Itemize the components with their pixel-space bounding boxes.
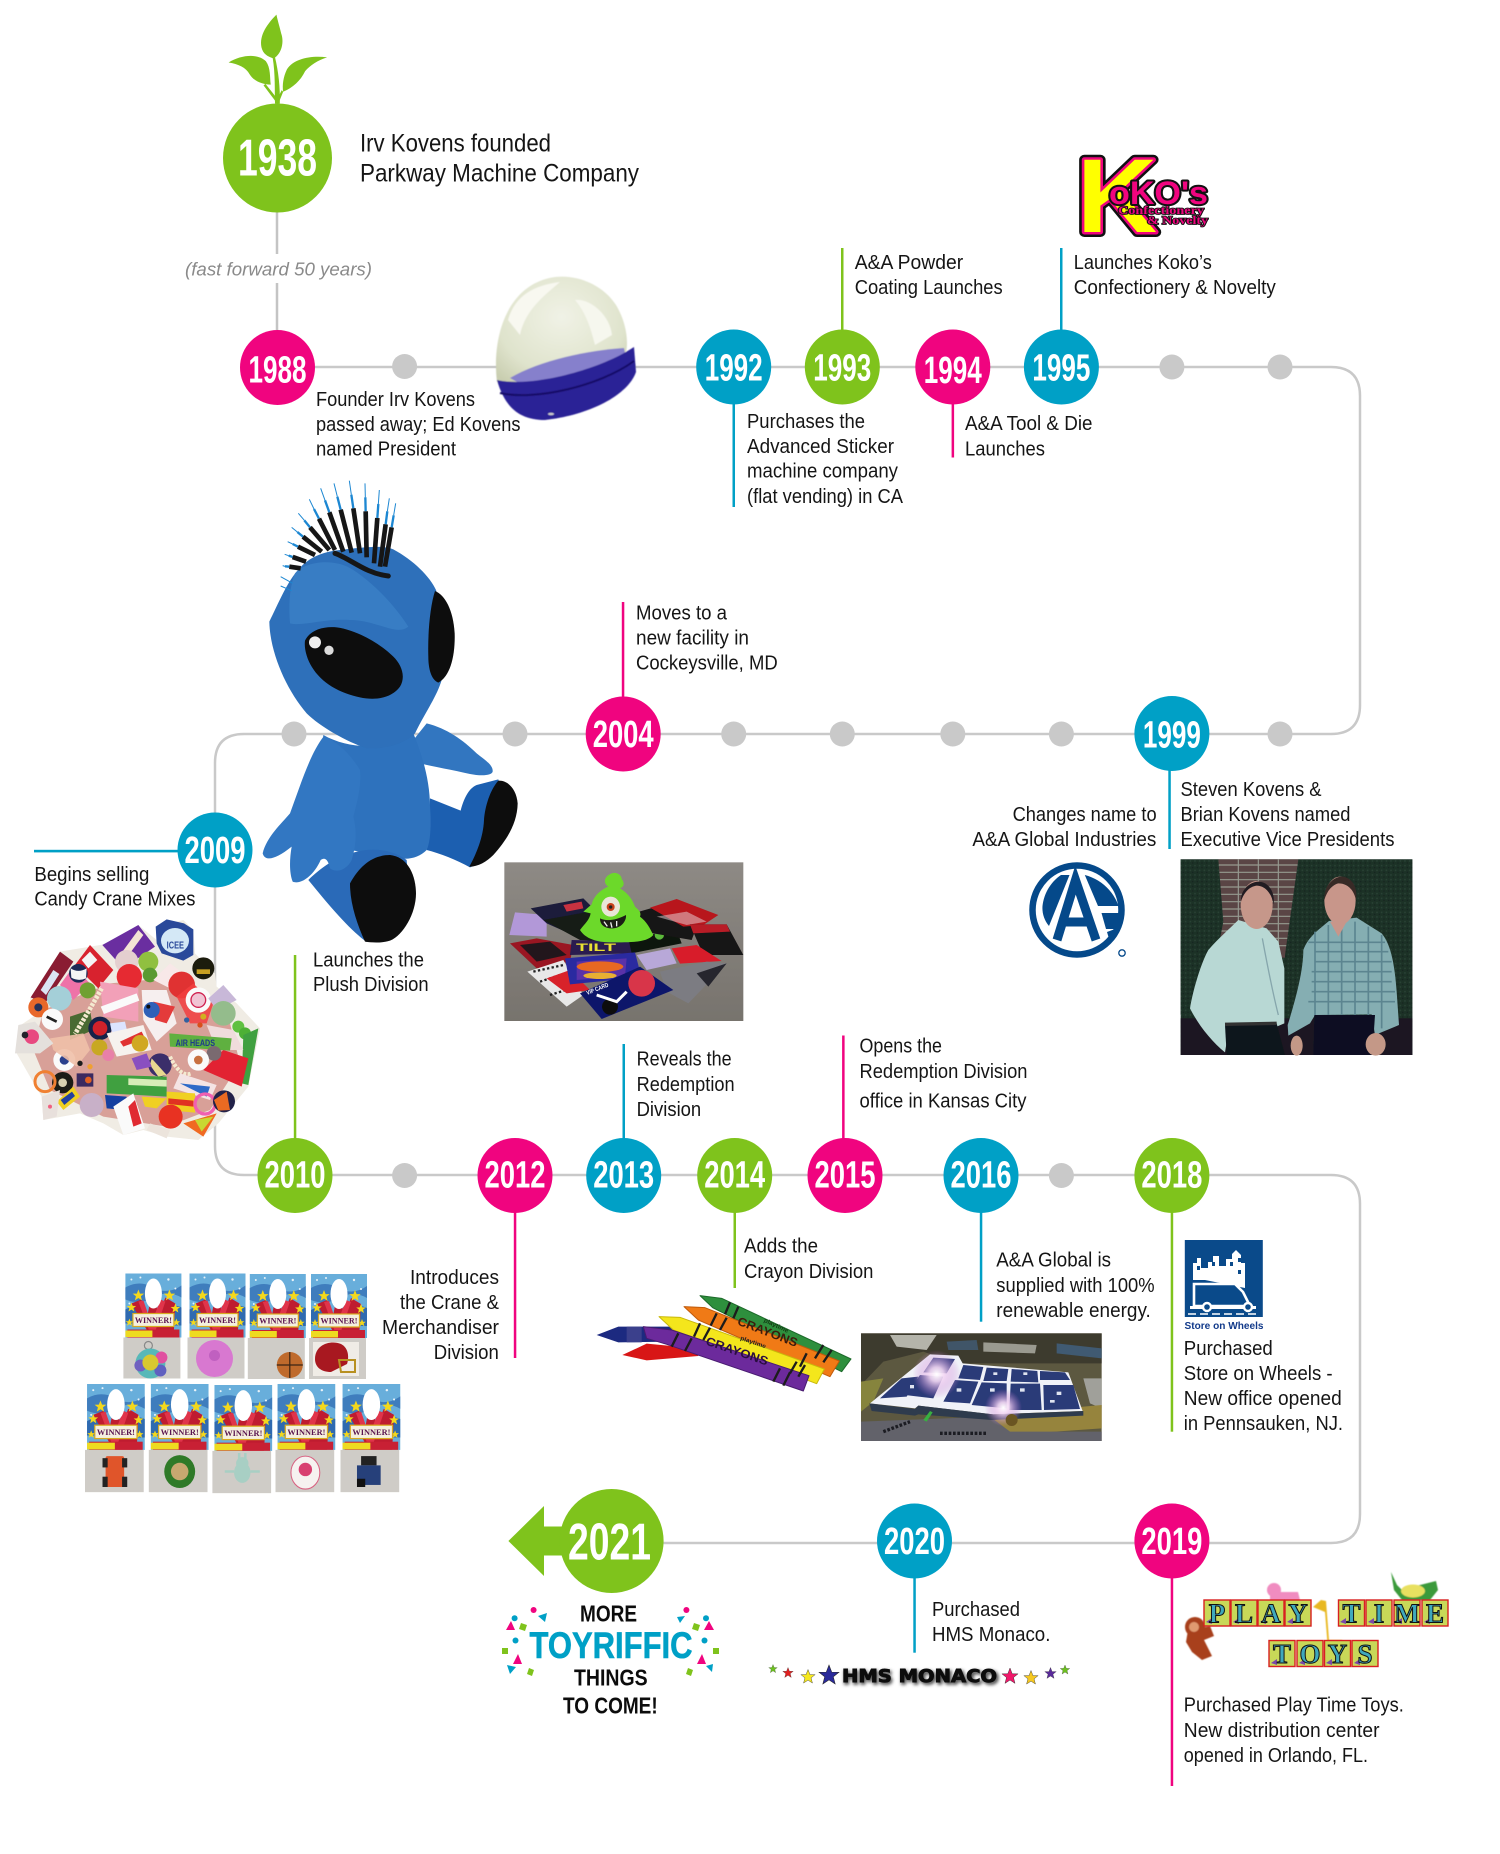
milestone: 2014: 2014 (704, 1154, 765, 1196)
callout: more toyriffic things to come (502, 1600, 719, 1718)
card: green ball (149, 1384, 209, 1492)
callout: more toyriffic things to come: THINGS (574, 1664, 648, 1690)
logo: Store on Wheels: Store on Wheels (1184, 1321, 1264, 1332)
image: candy crane mix pile (15, 919, 260, 1140)
text: 2016: renewable energy. (996, 1299, 1151, 1322)
text: 2012: Division (434, 1341, 499, 1364)
confetti (502, 1607, 719, 1676)
text: 2004: Moves to a (636, 602, 728, 624)
card: baseball (276, 1384, 335, 1492)
milestone: 2016 (944, 1138, 1018, 1322)
milestone: 2004: 2004 (593, 714, 654, 756)
milestone: 2013: 2013 (593, 1154, 654, 1196)
timeline dots (282, 354, 1292, 1188)
logo: Koko's Confectionery & Novelty (1077, 138, 1208, 255)
icon: sprout (229, 15, 327, 104)
milestone: 1938 (223, 104, 332, 212)
milestone: 2009 (34, 812, 252, 888)
text: 2019 (1184, 1694, 1404, 1767)
text: 2015: Opens the (860, 1034, 942, 1058)
milestone: 2012: 2012 (484, 1154, 546, 1196)
text: 2016: supplied with 100% (996, 1274, 1155, 1297)
milestone: 1938: 1938 (238, 130, 317, 188)
text: 1999 name change (972, 803, 1157, 851)
text: 1993 (855, 251, 1003, 299)
milestone: 2020: 2020 (884, 1521, 945, 1563)
milestone: 1995 (1024, 248, 1099, 404)
logo letters: Y (1328, 1639, 1347, 1669)
text: 1999 executive vice presidents: Steven Kovens & (1180, 778, 1322, 801)
image: toy capsule (496, 277, 636, 420)
photo: redemption cards and green monster: VIP CARD (586, 982, 610, 997)
text: 2016 (996, 1248, 1155, 1322)
timeline path (215, 367, 1360, 1543)
text: 2013 (637, 1048, 735, 1121)
milestone: 1993: 1993 (813, 348, 871, 390)
milestone: 1988 (240, 330, 315, 405)
text: 1994: Launches (965, 438, 1045, 460)
photo: redemption cards and green monster (504, 862, 743, 1021)
logo letters: A (1261, 1598, 1281, 1628)
milestone: 2013 (586, 1044, 661, 1213)
milestone: 1999 (1134, 696, 1209, 849)
logo: HMS Monaco: HMS MONACO (842, 1666, 997, 1687)
text: 1992: Advanced Sticker (747, 435, 894, 458)
milestone: 1992 (696, 330, 771, 507)
text: 2014: Crayon Division (744, 1260, 873, 1283)
milestone: 1994 (915, 330, 990, 458)
text: 1995: Launches Koko’s (1074, 251, 1212, 274)
card: red truck (85, 1384, 145, 1492)
text: 1994: A&A Tool & Die (965, 412, 1092, 435)
card: flower keychain: WINNER! (135, 1316, 172, 1325)
text: 2012: Merchandiser (382, 1316, 499, 1339)
image: crayons (597, 1296, 851, 1391)
card: basketball (248, 1274, 306, 1379)
text: 2010 (313, 948, 429, 996)
card: basketball: WINNER! (259, 1316, 296, 1326)
callout: more toyriffic things to come: TO COME! (563, 1692, 658, 1718)
text: 1999 executive vice presidents: Executive Vice Presidents (1180, 828, 1394, 851)
logo: Koko's Confectionery & Novelty: oKO's (1109, 175, 1208, 211)
logo letters: L (1235, 1598, 1253, 1628)
text: 1999 executive vice presidents: Brian Kovens named (1180, 803, 1350, 826)
milestone: 2016: 2016 (950, 1154, 1012, 1196)
text: 1994 (965, 412, 1092, 460)
text: 2014 (744, 1234, 873, 1283)
text: 1938 founding: Parkway Machine Company (360, 160, 639, 188)
logo letter blocks (1204, 1600, 1448, 1666)
milestone: 2004 (586, 602, 661, 772)
logo letters: S (1357, 1639, 1373, 1669)
text: 1988: named President (316, 438, 456, 460)
image: crayons: CRAYONS (704, 1334, 770, 1368)
image: candy crane mix pile: ICEE (167, 940, 184, 951)
text: 1999 name change: A&A Global Industries (972, 828, 1156, 851)
text: 2012 (382, 1266, 499, 1364)
text: 2015: Redemption Division (860, 1060, 1028, 1083)
card: red truck: WINNER! (97, 1428, 135, 1437)
logo: Play Time Toys (1185, 1572, 1448, 1669)
logo letters: T (1273, 1639, 1291, 1669)
logo: A&A Global (1032, 866, 1125, 956)
text: 1999 name change: Changes name to (1013, 803, 1157, 826)
text: 2020: Purchased (932, 1598, 1020, 1621)
text: 2010: Plush Division (313, 973, 429, 996)
card: pink disc (188, 1274, 246, 1378)
text: 2014: Adds the (744, 1234, 818, 1258)
card: football helmet (309, 1274, 367, 1379)
milestone: 2015: 2015 (814, 1154, 876, 1196)
text: 1992: (flat vending) in CA (747, 485, 903, 508)
image: crayons: playtime (739, 1336, 767, 1350)
logo: Store on Wheels (1184, 1240, 1264, 1332)
milestone: 2010 (258, 955, 332, 1213)
text: 2015 (860, 1034, 1028, 1112)
logo: Koko's Confectionery & Novelty: K (1077, 138, 1157, 255)
text: 2009: Begins selling (34, 863, 149, 886)
card: baseball: WINNER! (287, 1428, 326, 1437)
milestone: 2020 (877, 1504, 952, 1653)
logo letters (1209, 1598, 1444, 1669)
text: 2013: Reveals the (637, 1048, 732, 1070)
logo letters: M (1394, 1598, 1420, 1628)
text: 1938 founding (360, 130, 639, 188)
logo animals (1185, 1572, 1438, 1660)
image: crane winner cards (85, 1274, 400, 1493)
milestone: 1999: 1999 (1143, 714, 1201, 756)
milestone: 2014 (697, 1138, 772, 1288)
text: 2018: Store on Wheels - (1184, 1362, 1333, 1385)
photo: redemption cards and green monster: TILT (576, 942, 616, 954)
text: 1988 (316, 388, 520, 460)
text: 2012: the Crane & (400, 1291, 499, 1314)
text: 1992 (747, 410, 903, 508)
milestone: 2021 (560, 1489, 664, 1593)
text: 2020: HMS Monaco. (932, 1623, 1050, 1646)
text: 2019: New distribution center (1184, 1719, 1380, 1742)
text: 2012: Introduces (410, 1266, 499, 1289)
logo: Koko's Confectionery & Novelty: K (1077, 138, 1157, 255)
text: 2018 (1184, 1337, 1343, 1435)
logo letters: Y (1288, 1598, 1308, 1628)
card: mint bunny: WINNER! (224, 1429, 263, 1438)
card: mint bunny (212, 1385, 272, 1493)
logo letters: T (1342, 1598, 1361, 1628)
milestone: 2019 (1134, 1504, 1209, 1786)
milestone: 1992: 1992 (705, 348, 763, 390)
image: crayons: playtime (762, 1318, 790, 1335)
milestone: 1995: 1995 (1032, 348, 1090, 390)
text: fast forward 50 years: (fast forward 50 years) (185, 260, 372, 280)
text: 2019: opened in Orlando, FL. (1184, 1744, 1368, 1767)
callout: more toyriffic things to come: MORE (580, 1600, 637, 1626)
milestone: 2009: 2009 (184, 830, 246, 872)
logo letters: P (1209, 1598, 1225, 1628)
text: 2018: New office opened (1184, 1387, 1342, 1410)
text: 2020 (932, 1598, 1050, 1646)
card: green ball: WINNER! (161, 1428, 199, 1437)
text: 1992: machine company (747, 460, 899, 482)
milestone: 1994: 1994 (924, 350, 982, 392)
text: 1995 (1074, 251, 1276, 299)
card: dark figure: WINNER! (352, 1428, 391, 1437)
card: flower keychain (123, 1274, 181, 1378)
logo: HMS Monaco (769, 1664, 1070, 1689)
text: 2004: Cockeysville, MD (636, 652, 778, 674)
text: 1938 founding: Irv Kovens founded (360, 130, 551, 158)
milestone: 2019: 2019 (1141, 1521, 1202, 1563)
logo: Koko's Confectionery & Novelty: & Novelty (1147, 215, 1208, 227)
text: 2018: Purchased (1184, 1337, 1273, 1360)
text: 1993: Coating Launches (855, 276, 1003, 299)
card: pink disc: WINNER! (199, 1316, 236, 1325)
image: blue alien plush (263, 481, 518, 943)
logo: Koko's Confectionery & Novelty: Confectionery (1118, 205, 1204, 217)
milestone: 2010: 2010 (264, 1154, 326, 1196)
text: 2013: Redemption (637, 1073, 735, 1096)
milestone: 2021: 2021 (568, 1513, 651, 1571)
card: dark figure (340, 1384, 400, 1492)
milestone: 2018: 2018 (1141, 1154, 1202, 1196)
milestone: 2015 (808, 1036, 882, 1213)
text: 2013: Division (637, 1098, 701, 1121)
text: 2015: office in Kansas City (860, 1090, 1027, 1112)
text: 2018: in Pennsauken, NJ. (1184, 1412, 1343, 1435)
text: 2009: Candy Crane Mixes (34, 888, 195, 910)
image: crayons: CRAYONS (736, 1314, 800, 1350)
card: football helmet: WINNER! (320, 1316, 358, 1326)
milestone: 1988: 1988 (248, 349, 306, 391)
logo block accents (1206, 1618, 1430, 1665)
image: candy crane mix pile: AIR HEADS (176, 1038, 215, 1048)
text: 1988: passed away; Ed Kovens (316, 413, 520, 436)
text: 1988: Founder Irv Kovens (316, 388, 475, 411)
text: 2009 (34, 863, 195, 910)
logo letters: O (1299, 1639, 1321, 1669)
logo letters: E (1426, 1598, 1444, 1628)
text: 2019: Purchased Play Time Toys. (1184, 1694, 1404, 1716)
arrow: 2021 (508, 1506, 575, 1576)
milestone: 2012 (478, 1138, 552, 1358)
text: 1993: A&A Powder (855, 251, 963, 274)
text: 1992: Purchases the (747, 410, 865, 433)
milestone: 2018 (1134, 1138, 1209, 1432)
connector: 1938 to 1988 (276, 212, 278, 330)
photo: solar panel roof (861, 1333, 1102, 1441)
text: 2016: A&A Global is (996, 1248, 1111, 1272)
text: 1995: Confectionery & Novelty (1074, 276, 1276, 299)
text: 2004: new facility in (636, 626, 749, 650)
callout: more toyriffic things to come: TOYRIFFIC (530, 1625, 692, 1666)
text: 2010: Launches the (313, 948, 424, 972)
text: 1999 executive vice presidents (1180, 778, 1394, 851)
logo: HMS Monaco: HMS MONACO (843, 1668, 999, 1689)
plush mohawk spikes (281, 481, 396, 591)
milestone: 1993 (805, 248, 880, 404)
logo letters: I (1374, 1598, 1384, 1628)
photo: Steven and Brian Kovens (1181, 859, 1412, 1056)
text: 2004 (636, 602, 778, 674)
